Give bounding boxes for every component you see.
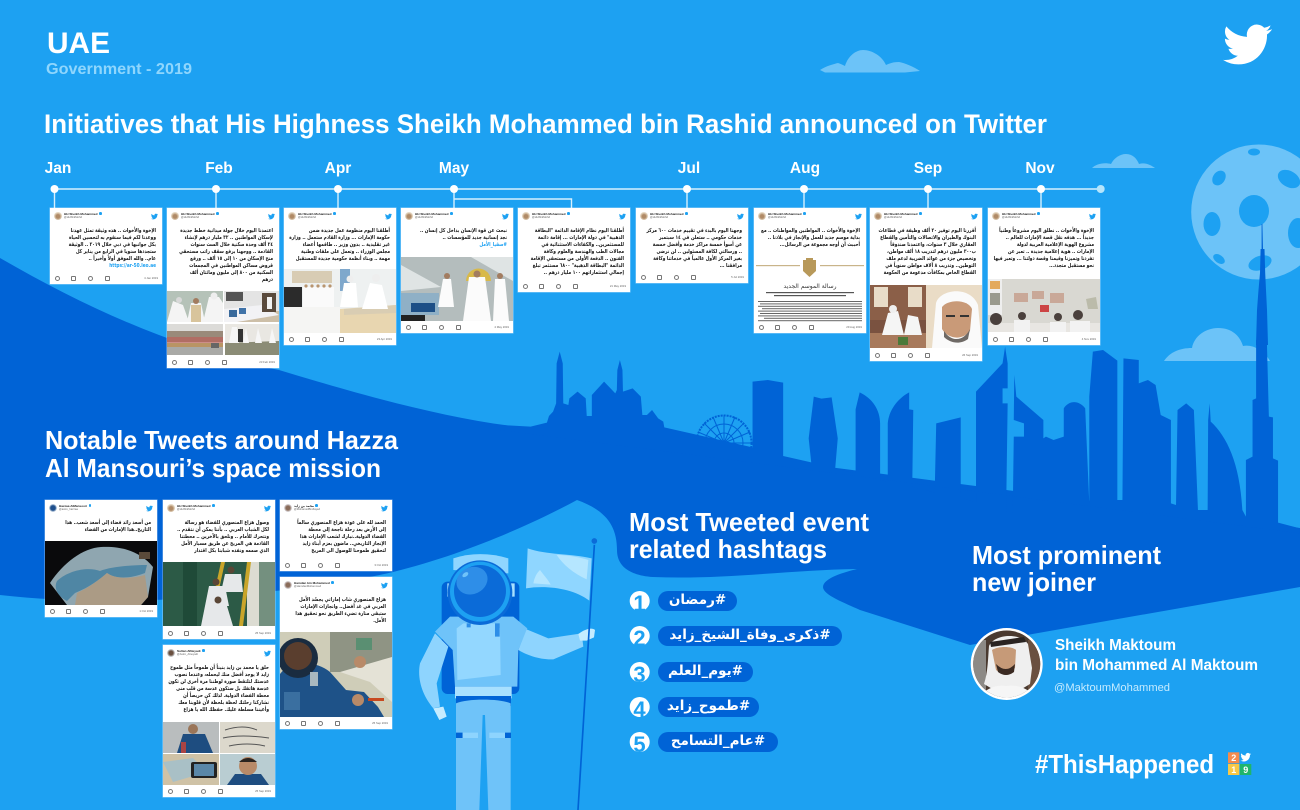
tweet text: خدمات حكومي .. ستعلن في ١٤ سبتمبر [659,235,742,241]
tweet text: القادمة هي المريخ عن طريق مسبار الأمل [181,541,269,547]
tweet text: نحو مستقبل متجدد... [1049,263,1094,269]
tweet text: مجلس الوزراء .. وتعمل على ملفات وطنية [301,249,390,255]
tweet text: الإنجاز التاريخي.. ماضون بعزم أبناء زايد [303,541,386,547]
tweet text: بغير المركز الأول عالمياً في خدماتنا وكافة [653,256,742,262]
tweet text: عام.. والله الموفق أولاً وأخيراً .. [88,256,156,262]
tweet: September: @HHShkMohd [884,216,902,219]
tweet text: التاريخ..هذا الإمارات من الفضاء [85,527,151,533]
timeline: Apr [325,160,351,177]
cloud: near November [1092,154,1155,168]
tweet text: إلى الأرض بعد رحلة ناجحة إلى محطة [308,527,386,533]
tweet: February [167,208,279,368]
tweet text [295,596,386,624]
tweet text: حلق يا محمد بن زايد بنيناً أن طموحاً مثل طموح [170,664,269,670]
tweet: September: 26 Sep 2019 [962,353,978,357]
tweet text: ب٣٠٠ مليون درهم لتدريب ١٨ ألف مواطن، [887,249,976,255]
timeline: Sep [914,160,942,177]
astronaut with flag [419,538,598,810]
tweet: August: @HHShkMohd [768,216,786,219]
tweet text: عدستك لتلتقط صورة لوطننا مرة أخرى لن تكون [168,679,269,685]
hashtag 5 [658,732,778,752]
tweet: May [401,208,513,333]
tweet text: وصول هزاع المنصوري للفضاء هو رسالة [185,520,269,526]
tweet text: السكنية من ٨٠٠ إلى مليون ومائتان ألف [190,270,273,276]
tweet: November: 4 Nov 2019 [1082,337,1096,341]
tweet text: مهمة .. وبناء أنظمة حكومية جديدة للمستقبل [296,256,390,262]
tweet text: ووعدنا لكم فيما سنقوم به لتحسين الحياة [69,235,156,241]
tweet: August: HH Sheikh Mohammed [768,212,802,216]
tweet text [65,518,151,533]
tweet text: الفضاء الدولية..نبارك لشعب الإمارات هذا [300,534,386,540]
tweet photo [284,269,396,333]
hashtag 1 [658,591,737,611]
joiner name: bin Mohammed Al Maktoum [1055,657,1258,674]
tweet: space E: 25 Sep 2019 [255,789,271,793]
dark blue terrain band [0,258,1300,645]
joiner handle: @MaktoumMohammed [1054,682,1170,694]
tweet text: بداية موسم جديد للعمل والإنجاز في بلادنا .. [768,235,860,241]
heading: most tweeted hashtags: Most Tweeted event [629,507,869,537]
ranking numbers [630,591,650,757]
tweet: space B: @HHShkMohd [177,508,195,511]
tweet text: الحمد لله على عودة هزاع المنصوري سالماً [297,520,386,526]
ferris wheel [696,415,752,471]
tweet text: التوطين.. وتدريب ٨ آلاف مواطن سنوياً في [885,263,976,269]
timeline: Aug [790,160,820,177]
tweet text: أطلقنا اليوم منظومة عمل جديدة ضمن [309,228,390,234]
tweet text: نشاركنا رحلتك لحظة بلحظة لأن قلوبنا معك [178,700,269,706]
tweet: September [870,208,982,361]
tweet: May: 4 May 2019 [494,325,509,329]
tweet text: ونتحرك للأمام .. ونلحق بالآخرين .. محطتنا [180,534,269,540]
tweet text: وأعيننا مسلطة عليك. حفظك الله يا هزاع [183,707,269,713]
tweet text: .. ورسالتي لكافة المسئولين .. لن نرضى [656,249,742,255]
tweet: August: 29 Aug 2019 [846,325,862,329]
tweet text: قروض مساكن المواطنين في المجمعات [189,263,273,269]
hashtag 3 [658,662,753,682]
tweet: space C [280,500,392,571]
rocket crew photo [163,562,275,626]
avatar: Sheikh Maktoum [970,628,1044,702]
tweet text: الذي صممه ونفذه شبابنا بكل اقتدار [194,548,269,554]
tweet: November: HH Sheikh Mohammed [1002,212,1036,216]
tweet text: وجهنا اليوم بالبدء في تقييم خدمات ٦٠٠ مركز [646,228,742,234]
tweet: July: 5 Jul 2019 [731,275,744,279]
timeline: Jan [45,160,71,177]
heading: notable tweets: Notable Tweets around Hazza [45,425,399,455]
tweet text: أطلقنا اليوم نظام الإقامة الدائمة "البطاقة [535,228,624,234]
tweet text: نجد إنسانية جديد للمؤسسات .. [442,235,507,241]
tweet: April: HH Sheikh Mohammed [298,212,332,216]
tweet: July: @HHShkMohd [650,216,668,219]
tweet: space E [163,645,275,797]
hashtags list [658,591,842,752]
tweet text: زايد لا يوجد أفضل منك ليحمله، وعندما نصوب [174,672,269,678]
tweet text: من أسعد رائد فضاء إلى أسعد شعب.. هذا [65,520,151,526]
cloud: top centre [820,50,920,72]
tweet: July [636,208,748,283]
tweet text: القادمة .. ووجهنا برفع سقف راتب مستحقي [179,249,273,255]
tweet text: أقررنا اليوم توفير ٢٠ ألف وظيفة في قطاعات [879,228,976,234]
tweet text: درهم [262,277,273,283]
tweet text: للمستثمرين.. والكفاءات الاستثنائية في [541,242,624,248]
tweet: November [988,208,1100,345]
tweet: January: @HHShkMohd [64,216,82,219]
tweet text: لإسكان المواطنين .. ٣٢ مليار درهم لإنشاء [185,235,273,241]
tweet text [179,228,273,283]
hashtag 4: #طموح_زايد [667,698,750,714]
tweet text [168,664,269,713]
tweet text: البنوك والطيران والاتصالات والتأمين والقطاع [880,235,976,241]
tweet text: مجالات الطب والهندسة والعلوم وكافة [544,249,624,255]
tweet: April: 23 Apr 2019 [377,337,392,341]
tweet: February: HH Sheikh Mohammed [181,212,215,216]
tweet text: مشروع الهوية الإعلامية العربية لدولة [1017,242,1094,248]
tweet text: إجمالي استثماراتهم ١٠٠ مليار درهم .. [544,270,624,276]
timeline: Jul [678,160,700,177]
tweet text: وتخصيص جزء من عوائد الضريبة لدعم ملف [886,256,976,262]
hashtag 3: #يوم_العلم [668,663,743,679]
tweet text: الدائمة "البطاقة الذهبية" ٦٨٠٠ مستثمر تبلغ [533,263,624,269]
tweet text: الإخوة والأخوات .. المواطنين والمواطنات .. مع [761,228,860,234]
tweet text: ستبقى منارة تضيء الطريق نحو تحقيق هذا [295,611,386,617]
tweet: space B: HH Sheikh Mohammed [177,504,211,508]
ranking numbers: 4 [633,697,646,722]
city skyline silhouette [500,340,1300,533]
tweet text: العربي في غد أفضل.. وانجازات الإمارات [300,604,386,610]
tweet: August [754,208,866,333]
tweet: April: @HHShkMohd [298,216,316,219]
ranking numbers: 2 [633,626,646,651]
timeline [45,160,1105,208]
hashtag 4 [658,697,759,717]
heading: notable tweets: Al Mansouri’s space mission [45,453,381,483]
tweet text: لتحقيق طموحنا للوصول الى المريخ [311,548,386,554]
hashtag 1: #رمضان [669,592,726,608]
tweet text: #سقيا_الأمل [479,242,507,248]
tweet: May: @HHShkMohd [415,216,433,219]
tweet text [68,226,156,269]
tweet: April [284,208,396,345]
logo: 2019 tiles: 9 [1243,765,1248,775]
hashtag 2: #ذكرى_وفاة_الشيخ_زايد [669,627,831,643]
tweet: November: @HHShkMohd [1002,216,1020,219]
tweet text: مرافقنا ... [720,263,742,269]
tweet text: هزاع المنصوري شاب إماراتي يجسّد الأمل [299,597,386,603]
tweet: space A [45,500,157,617]
tweet text: القطاع الخاص بمكافآت مدعومة من الحكومة [884,270,976,276]
tweet: May golden card [518,208,630,292]
tweet: space D [280,577,392,729]
tweet: February: 23 Feb 2019 [259,360,275,364]
tweet text [530,226,624,276]
tweet: May golden card: 21 May 2019 [610,284,626,288]
tweet text: الفنون .. الدفعة الأولى من مستحقي الإقامة [531,256,624,262]
tweet: space A: 1 Oct 2019 [139,609,153,613]
ranking numbers: 5 [633,732,646,757]
tweet text: حكومة الإمارات ... وزارة القادم ستعمل .. وزارة [289,235,390,241]
tweet text: نبحث عن قوة الإنسان بداخل كل إنسان .. [420,228,507,234]
tweet text [420,228,507,248]
skyline: Burj spire [1256,224,1268,345]
astronaut in cabin photo [280,632,392,717]
tweet text [646,228,742,269]
tweet text: منح الإسكان من ١٠ إلى ١٥ ألف .. ورفع [190,256,273,262]
tweet: space C: محمد بن زايد [294,504,314,508]
cloud: behind skyline [1164,328,1270,361]
hashtag: ThisHappened: #ThisHappened [1035,749,1214,779]
heading: most tweeted hashtags: related hashtags [629,534,827,564]
tweet text [297,518,386,554]
tweet: January: 4 Jan 2019 [144,276,158,280]
tweet text: تفردنا وتميزنا وقيمنا وقصة دولتنا ... وتعبر فيها [994,256,1094,262]
tweet: February: @HHShkMohd [181,216,199,219]
tweet: space E: @Astro_Alneyadi [177,653,198,656]
timeline: Nov [1025,160,1055,177]
heading: initiatives: Initiatives that His Highness Sheikh Mohammed bin Rashid announced on Twitter [44,109,1047,139]
joiner name: Sheikh Maktoum [1055,637,1176,654]
tweet: May: HH Sheikh Mohammed [415,212,449,216]
tweet photo [401,257,513,321]
tweet photo grid [167,291,279,355]
tweet: space C: 3 Oct 2019 [374,563,388,567]
tweet text: جديداً ... هدفه نقل قصة الإمارات للعالم .. [1006,235,1094,241]
tweet: space A: @astro_hazzaa [59,508,78,511]
hashtag 5: #عام_التسامح [671,733,765,749]
tweet text: الإخوة والأخوات .. هذه وثيقة تمثل عهدنا [71,228,156,234]
tweet text: أحببت أن أوجه مجموعة من الرسائل... [780,242,860,248]
tweet: January: HH Sheikh Mohammed [64,212,98,216]
tweet text: محطة الفضاء الدولية. لذلك كن حريصاً أن [183,693,269,699]
tweet text [289,226,390,262]
tweet text: غير تقليدية .. بدون وزير .. طاقمها أعضاء [303,242,390,248]
tweet: space A: Hazzaa AlMansoori [59,504,87,508]
tweet: space D: Hamdan bin Mohammed [294,581,330,585]
tweet: September: HH Sheikh Mohammed [884,212,918,216]
tweet: January [50,208,162,284]
logo: 2019 tiles: 1 [1231,765,1236,775]
tweet: space D: 25 Sep 2019 [372,721,388,725]
tweet photo [988,279,1100,332]
tweet: July: HH Sheikh Mohammed [650,212,684,216]
tweet text: https://ar-50.leo.ae [109,263,156,269]
tweet text: بكل جوانبها في دبي خلال ٢٠١٩ .. الوثيقة [69,242,156,248]
icon: twitter bird [1223,24,1272,64]
timeline: Feb [205,160,233,177]
timeline: May [439,160,469,177]
ranking numbers: 1 [633,591,646,616]
tweet text: ٢٤ ألف وحدة سكنية خلال الست سنوات [191,242,273,248]
earth photo [45,541,157,605]
tweet text: الذهبية" في دولة الإمارات ... إقامة دائمة [538,235,624,241]
tweet: May golden card: @HHShkMohd [532,216,550,219]
tweet: space C: @MohamedBinZayed [294,508,320,511]
tweet: space D: @HamdanMohammed [294,585,321,588]
logo: 2019 tiles [1228,752,1251,775]
tweet text [994,226,1094,269]
moon [1191,144,1300,280]
tweet text [761,226,860,248]
tweet text: الإخوة والأخوات .. نطلق اليوم مشروعاً وطنياً [999,228,1094,234]
tweet text: الإمارات .. هوية إعلامية جديدة .. تعبر عن [1008,249,1094,255]
letter image: رسالة الموسم الجديد [783,283,837,290]
heading: most prominent new joiner: new joiner [972,567,1096,597]
tweet text: العقاري خلال ٣ سنوات، واعتمدنا صندوقاً [890,242,976,248]
ranking numbers: 3 [633,662,646,687]
logo: 2019 tiles: 2 [1231,753,1236,763]
tweet photo [870,285,982,348]
tweet text: عن أسوأ خمسة مراكز خدمة وأفضل خمسة [653,242,742,248]
heading: most prominent new joiner: Most prominent [972,540,1161,570]
tweet: May golden card: HH Sheikh Mohammed [532,212,566,216]
tweet text: ستجددها سنويا في الرابع من يناير كل [76,249,156,255]
logo heading: UAE: UAE [47,27,110,60]
subheading: Government 2019: Government - 2019 [46,61,192,78]
tweet text [177,520,269,554]
tweet text: عدسة هاتفك بل ستكون عدسة من قلب منى [176,686,269,692]
tweet text [878,226,976,276]
tweet: space B: 25 Sep 2019 [255,631,271,635]
tweet text: لكل الشباب العربي .. بأننا يمكن أن نتقدم .. [177,527,269,533]
tweet text: الأمل. [373,618,386,624]
photo grid [163,722,275,785]
tweet: space E: Sultan AlNeyadi [177,649,200,653]
letter image [756,258,864,322]
tweet text: اعتمدنا اليوم خلال جولة ميدانية خطط جديدة [180,228,273,234]
tweet: space B [163,500,275,639]
